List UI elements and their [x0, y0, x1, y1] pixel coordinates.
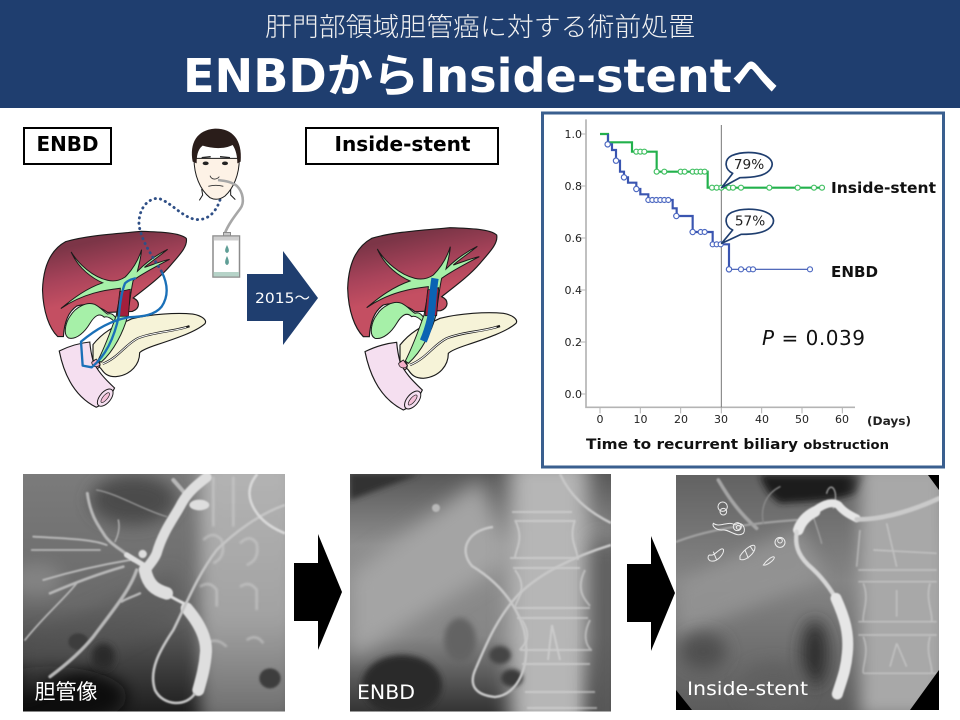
series label: Inside-stent: Inside-stent [831, 179, 936, 197]
catheter [153, 505, 285, 703]
caption: ENBD [357, 681, 415, 704]
x-ray: Inside-stent [676, 463, 947, 717]
label: ENBD [24, 128, 111, 164]
callout: 79% [722, 153, 772, 188]
x-axis labels: 60 [835, 413, 849, 426]
nasobiliary catheter [81, 198, 220, 367]
callout: 57% [722, 209, 773, 243]
x-axis labels: 0 [596, 413, 604, 426]
y-axis labels: 1.0 [564, 128, 582, 141]
x-axis labels: 40 [755, 413, 769, 426]
label: ENBD: ENBD [36, 132, 98, 156]
y-axis labels: 0.0 [564, 388, 582, 401]
bile duct branches [25, 480, 185, 677]
arrow: 2015 onward [247, 251, 318, 345]
main title: ENBDからInside-stentへ [183, 49, 778, 103]
callout: 79%: 79% [734, 157, 764, 173]
header band [0, 0, 960, 108]
y-axis labels: 0.2 [564, 336, 582, 349]
callout: 57%: 57% [735, 214, 765, 230]
y-axis labels: 0.6 [564, 232, 582, 245]
censor marks: Inside-stent [634, 149, 824, 190]
caption: 胆管像 [34, 681, 98, 704]
y-axis labels: 0.4 [564, 284, 582, 297]
x-axis labels: 30 [714, 413, 728, 426]
axis title: Time to recurrent biliary obstruction [586, 437, 889, 453]
background shading [350, 474, 611, 712]
catheters [466, 474, 611, 697]
arrow: to Inside-stent x-ray [627, 536, 675, 651]
panel: Kaplan-Meier chart [542, 113, 944, 467]
background shading [0, 460, 297, 720]
series label: ENBD: ENBD [831, 263, 878, 281]
caption: Inside-stent [687, 678, 808, 700]
arrow: 2015 onward: 2015～ [255, 291, 310, 307]
x-axis labels [596, 413, 849, 426]
ENBD curve [608, 134, 729, 269]
icon: drainage bag [213, 232, 240, 277]
x-ray: cholangiogram [23, 474, 285, 712]
hepatic branches [677, 480, 836, 543]
x-ray: ENBD [350, 474, 611, 712]
Inside-stent curve [600, 134, 824, 188]
spine [857, 523, 937, 673]
chart axes and ticks [580, 119, 855, 413]
main bile duct [127, 477, 209, 690]
bile duct [796, 498, 939, 694]
embolization coils [708, 502, 785, 565]
label: Inside-stent [306, 128, 498, 164]
x-axis labels: 10 [634, 413, 648, 426]
y-axis labels: 0.8 [564, 180, 582, 193]
inside stent [423, 278, 435, 341]
background shading [676, 463, 947, 717]
subtitle: 肝門部領域胆管癌に対する術前処置 [265, 12, 695, 42]
illustration: ENBD anatomy with nasobiliary drain [43, 129, 243, 409]
y-axis labels [564, 128, 582, 401]
fluoroscopy corner masks [676, 475, 939, 710]
p value: P = 0.039 [762, 326, 865, 350]
arrow: to ENBD x-ray [294, 534, 342, 650]
30-day reference line [720, 125, 723, 407]
drain tube [218, 180, 243, 233]
axis unit: (Days) [867, 414, 911, 428]
x-axis labels: 20 [674, 413, 688, 426]
label: Inside-stent: Inside-stent [334, 132, 471, 156]
illustration: Inside-stent anatomy [348, 228, 517, 412]
icon: patient face [192, 129, 241, 200]
spine [510, 512, 597, 708]
x-axis labels: 50 [795, 413, 809, 426]
censor marks: ENBD [605, 142, 812, 272]
